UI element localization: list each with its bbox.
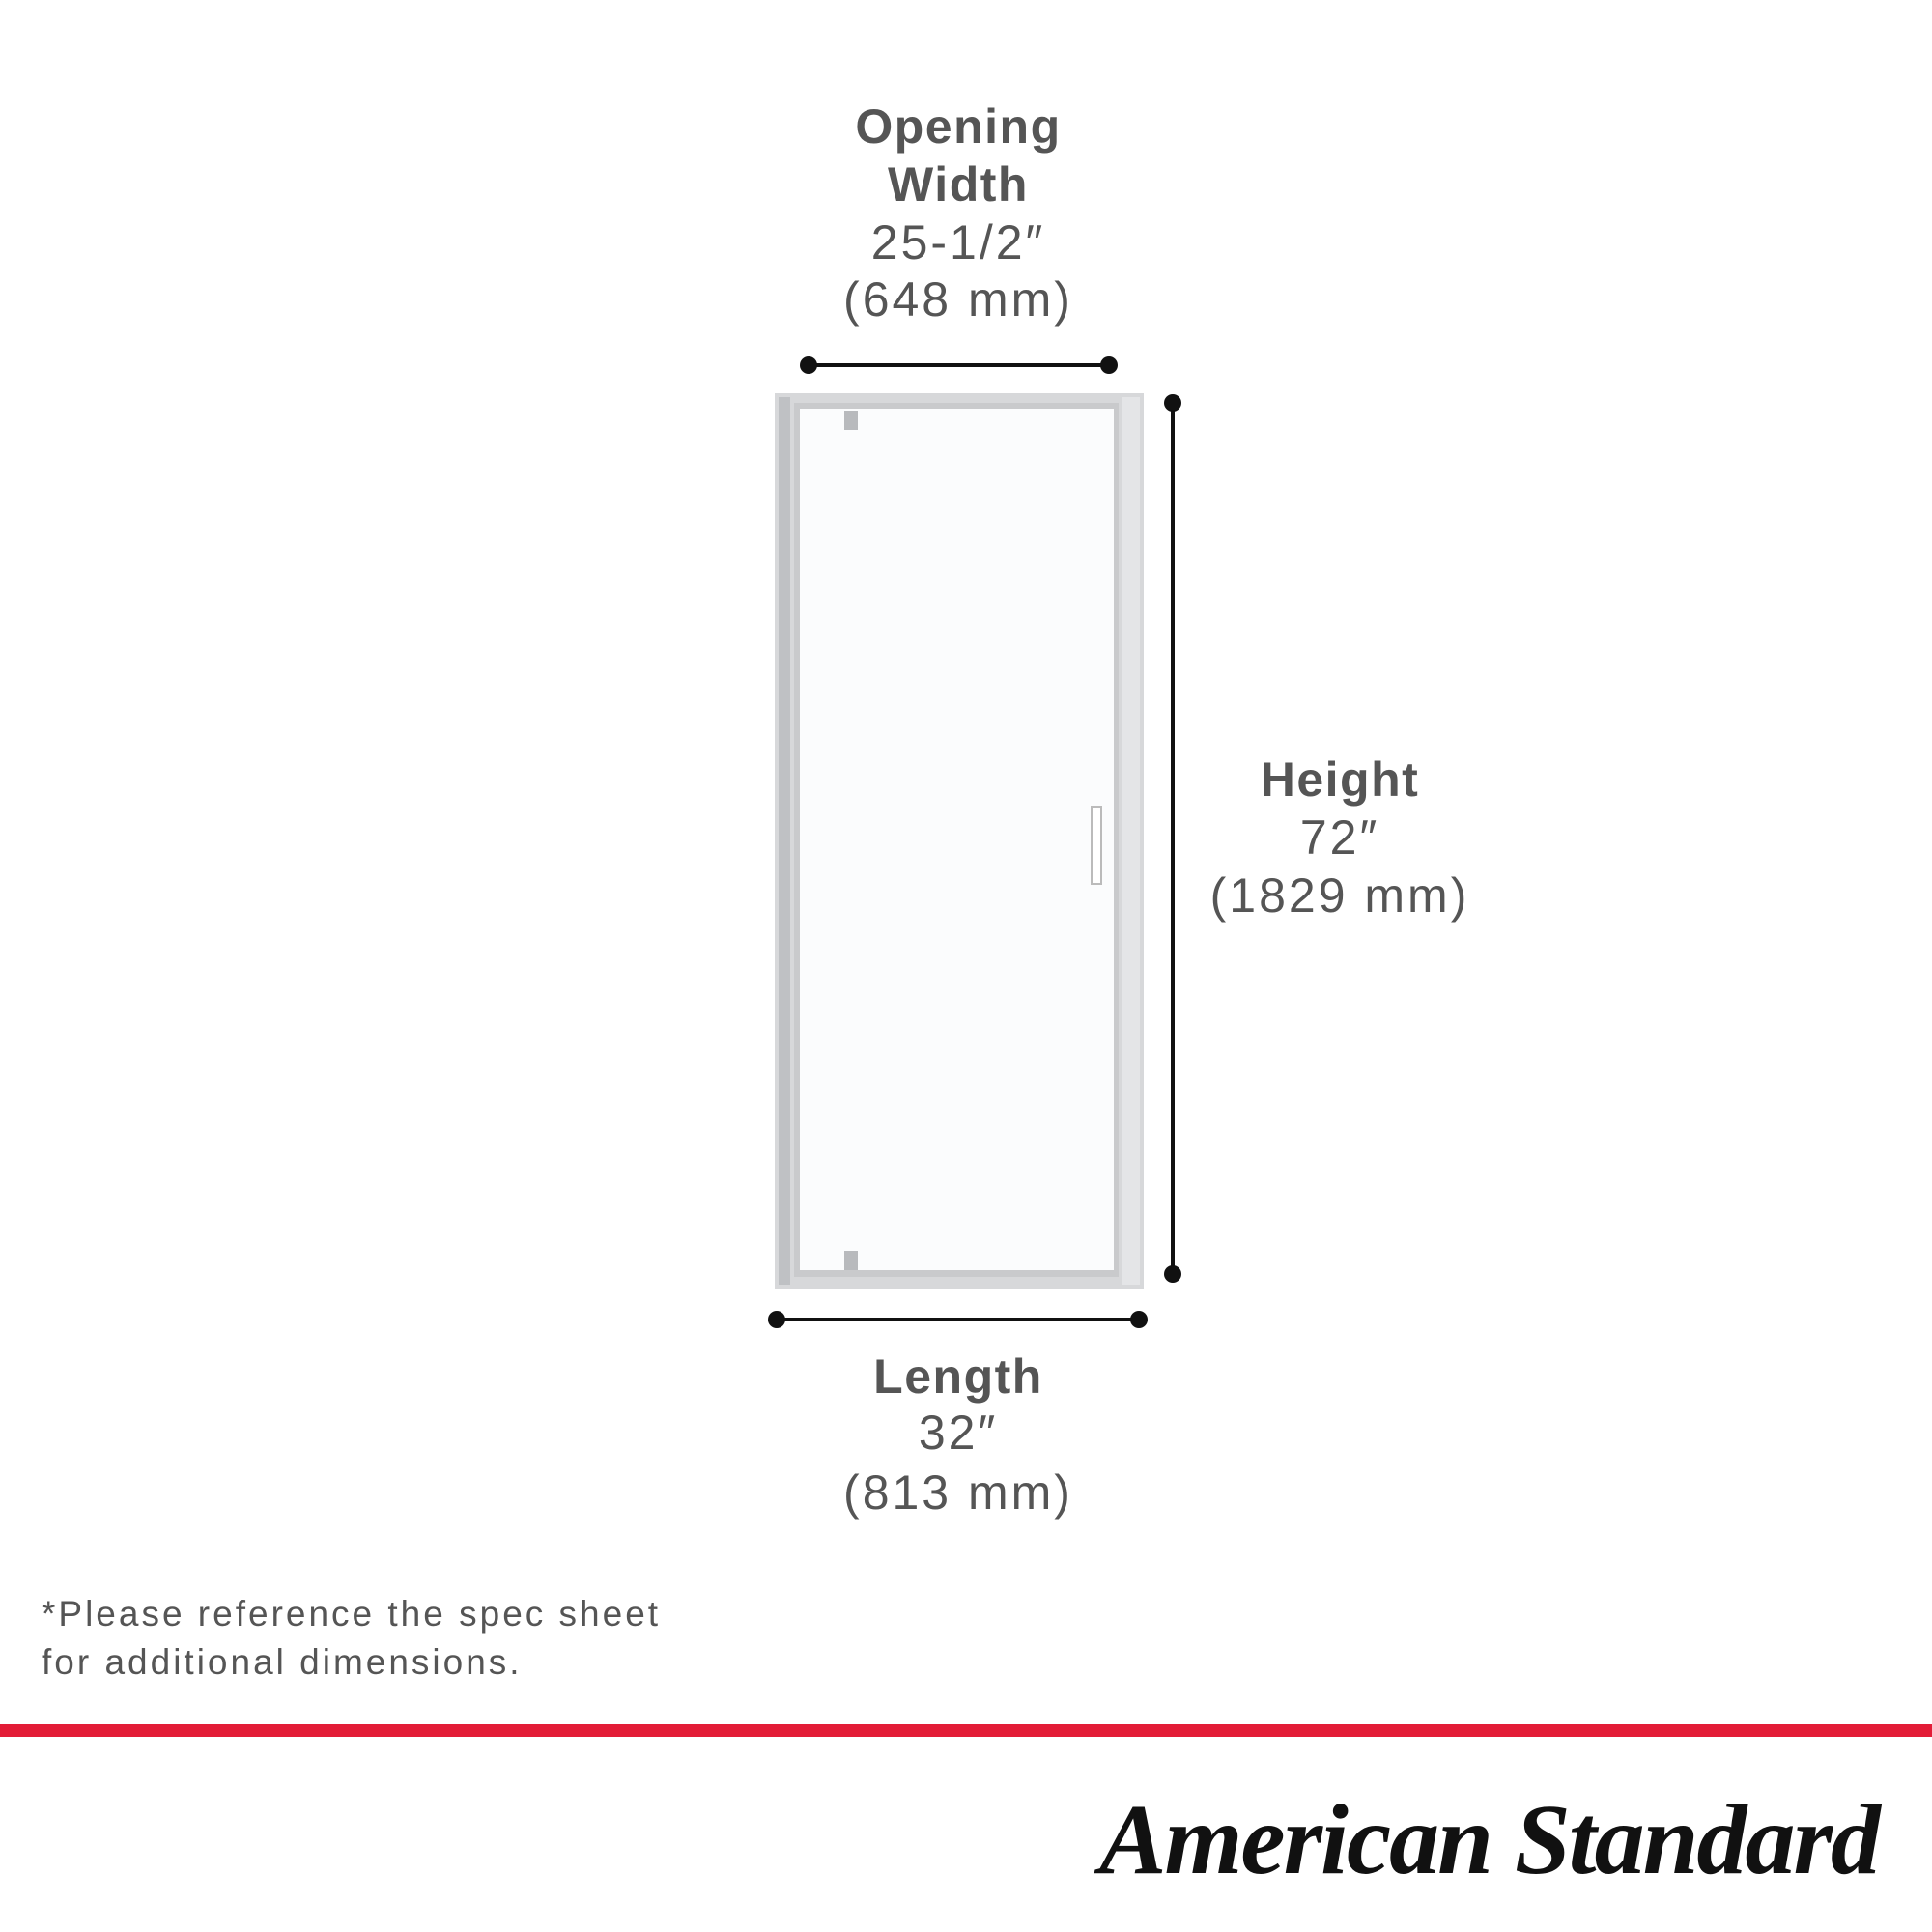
red divider (0, 1724, 1932, 1737)
label: opening width: Opening (855, 99, 1062, 154)
footnote: *Please reference the spec sheet (42, 1594, 661, 1634)
label: opening width: (648 mm) (843, 272, 1073, 327)
label: length: Length (873, 1350, 1043, 1404)
footnote: for additional dimensions. (42, 1642, 523, 1682)
label: opening width: 25-1/2″ (871, 215, 1045, 270)
label: length: 32″ (919, 1406, 998, 1460)
shower door (775, 393, 1144, 1289)
dimension line: height (1164, 394, 1181, 1283)
label: height: Height (1261, 753, 1419, 807)
dimension line: length (768, 1311, 1148, 1328)
label: height: 72″ (1300, 810, 1379, 865)
label: opening width: Width (888, 157, 1029, 212)
label: height: (1829 mm) (1210, 868, 1469, 923)
label: opening width (843, 99, 1073, 327)
logo: American Standard: American Standard (1099, 1784, 1879, 1895)
footnote (42, 1594, 661, 1682)
dimension line: opening width (800, 356, 1118, 374)
label: length (843, 1350, 1073, 1520)
label: length: (813 mm) (843, 1465, 1073, 1520)
label: height (1210, 753, 1469, 923)
